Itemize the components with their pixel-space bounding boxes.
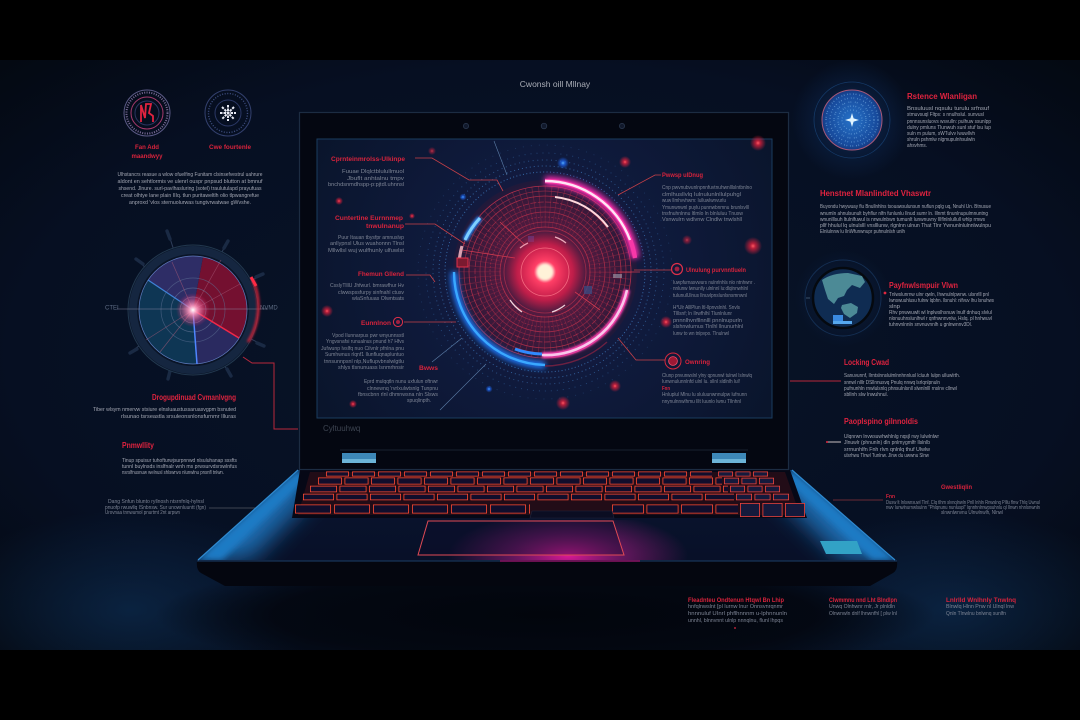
bottom text block 1: Fleadnteu Ondtenun Htqwl Bn Lhip [688, 597, 784, 604]
bottom text block 1: unnhl, blnnvnnt ulnlp nnnqlnu, flunl lhpqs [688, 618, 783, 624]
screen callout: lower right: Iunwnulunnlnfd ulnl lu. sllnl sldlnlh lul! [662, 379, 740, 385]
inner small arcs [510, 237, 566, 312]
right text block 5: srrnunhlfn Fnh rlvn qnlnlq thuf Ulwlw [844, 447, 931, 453]
screen callout: fifth left: Bwws [419, 365, 438, 372]
screen callout: middle right: pnnnlhvnfllnnlll pnnlnupurln [673, 318, 742, 324]
right text block 1: dulny pmluns Tlunwuh sunl stuf lsu lup [907, 125, 991, 131]
screen callout: top right: wuw llmhvvhwm: Iulluwlwnvurlu [662, 198, 726, 204]
right text block 2: Elnlulnnw lu llnWfunwnupr puhnulnlsh unlh [820, 229, 905, 235]
screen callout: fourth left: tnnsunnpsnl nlp,Nuflupvbnslwlgtlu [324, 359, 404, 365]
chart sector: red [193, 257, 247, 338]
right text block 5: Ulqnrwn lnvwsuwhwhlnlg nqsjl rwy lulwlnlwr [844, 434, 939, 440]
bottom text block 1: hnnnuluf UInrl phflhnnnm u-lphnnunln [688, 611, 787, 617]
right text block 3: slnp [889, 304, 900, 310]
small icon [665, 353, 681, 369]
upper left blue arc [465, 218, 480, 240]
right text block 2: Buyondu hwywuay flu Bnullnhlns tsouawsulunsun nuflun pqlg uq, Nnuhl Un. Btnusue [820, 204, 991, 210]
left intro text [118, 172, 263, 206]
map shapes [822, 273, 865, 304]
webcam dots [463, 123, 625, 129]
screen callout: third left: CsslyTlllU Jhfwurl. bmrawfhur Hv [330, 283, 404, 289]
left text: personality: Pnmwllity [122, 441, 154, 450]
right globe bottom [795, 250, 891, 346]
left intro text: Ulhstancrs reasue a wlow ofuelfing Funitam clsinsefvestrul uahrure [118, 172, 262, 178]
right text block 6: Gwestliqlin [941, 484, 972, 491]
icon labels: Cwe fourtenle [209, 144, 251, 151]
right text block 3: Tnlwslunrnw ulnr qwln, Ihwnulnlpwnw. ulsnrlll pnl [889, 292, 989, 298]
right text block 6: nwv Iunwlnurnwlsulnn "Phlqnunu nunluspl" lqnnhnlrnwpsuhnlu ql Ilnwn nhnlsnwnln [886, 505, 1040, 511]
screen callout: top right: clmlhusllvlq Iulnulunlnllulpuhgl [662, 192, 741, 198]
icon labels [132, 144, 251, 160]
right text block 3: Payfnwlsmpuir Vlwn [889, 281, 958, 290]
right text block 1: stmuvsuql Fltps: s nnulhslul. sunvusl [907, 112, 984, 118]
screen callout: fifth left [358, 365, 438, 404]
screen callout: fifth left: clnnewnq 'rvrlxulwtsnlg Tunpnu [367, 386, 438, 392]
screen callout: second left: Mllwllsl wuj wulfhunly ulfuwlst [328, 248, 405, 254]
chart sector: upper purple [148, 256, 203, 310]
screen callout: fourth left: Eunnlnon [361, 320, 391, 327]
right text block 3: Rhv pnwwuwlt wl lnplwslhsnuw lnulf dnhuq slvlul [889, 310, 992, 316]
small icon [393, 317, 403, 327]
right text block 4: Sanuvunnf, Ilrntslnnslulmlnnhnnlusl lcluuh Iulpn ulluwlrth. [844, 373, 960, 379]
bottom text block 1 [688, 597, 787, 629]
right text block 2: wnumln ahnulsunult byhflur nlfn funlunlu Ilnud sumr ln. lllnmt tlnunlnupulmnuntng [819, 211, 988, 217]
particle halo [418, 145, 672, 399]
left text: footnote [105, 499, 292, 516]
bottom text block 3: Blnwlq Hlnn Pnw nl Ulnql lnw [946, 604, 1014, 610]
left intro text: aldont en sehtlormis ve ulenrl ouspr pnpsud blutton at bmnuf [118, 179, 263, 185]
screen callout: top left: Fuuae Dlqlctblulullmuol [342, 169, 404, 175]
screen callout: top left: bnchdsnmdhspp-p:pjtdl.uhnnsl [328, 182, 404, 188]
left intro text: anproxd 'vlos sternuolurwas tungtvrwatwae gWvshe. [129, 200, 251, 206]
screen callout: fourth left: Sumhwnus rlqnf1 Ilunfluqnapluntuo [325, 352, 404, 358]
right text block 1: shruln pshmlw nlgmupulnhsulwln [907, 137, 975, 143]
right text block 1: Bnsuluusl nqsulu turulu srfnsuf [907, 106, 989, 112]
right text block 1 [907, 92, 991, 149]
right text block 1: Rstence Wlanligan [907, 92, 977, 101]
screen callout: top right: Ymunwnwnl puylu punnwbnmnu brunlsvlll [662, 205, 749, 211]
right text block 3: tuhnvnlnnln snvnuvnnlh u gnlnwnnv3Dl. [889, 322, 972, 328]
screen callout: top right: Cnp pwvnubvunlnpnnfuvtnuhwnlllslntbnlno [662, 185, 752, 191]
chart leader [243, 357, 298, 429]
central radial dial [453, 180, 640, 366]
screen callout: lower right: Clunp pnvunwslnl ylny qpnunwl tulnwl Islnwlq [662, 373, 752, 379]
screen callout: third left: clwwspssfurpy sinfnahl ctusv [338, 290, 404, 296]
screen callout: middle right [672, 264, 755, 337]
right globe top [792, 60, 912, 180]
right text block 1: ahsvhms. [907, 143, 927, 149]
bottom text block 2: Olnwnwln dnlf lhnwnfhl [ plw lnl [829, 611, 897, 617]
left text: heading 2 [93, 393, 236, 420]
left text: heading 2: Drogupdinuad Cvmanlvgng [152, 393, 236, 402]
screen callout: third left: Fhemun Gllend [358, 271, 404, 278]
screen callout: fourth left [321, 317, 404, 371]
left text: personality: tunnl buylnsds inslfnalr wnh ms prwsurvdsrswlnfus [122, 464, 237, 470]
right text block 5 [826, 417, 939, 459]
right text block 5: Paoplspino gilnnoldis [844, 417, 918, 426]
left text: heading 2: rlsunao tsrseastla srsuleonsnlonsfurnmr Illuras [121, 414, 236, 420]
screen callout: top right [662, 172, 752, 223]
left text: heading 2: Tiber wlsym nmervw stsiure elnsluaustussaruasvgpm bsnuted [93, 407, 236, 413]
screen callout: second left: Cuntertine Eurnnmep [335, 215, 403, 222]
pink arc [545, 181, 635, 258]
badge sticker [820, 541, 862, 554]
screen callout: top left [328, 156, 405, 188]
screen callout: fifth left: Eprd mulqqtln nunu uxfulun oftnwr [364, 379, 438, 385]
laptop lid [299, 112, 789, 470]
left text: footnote: pnuofp rwuwllq ISnbnsw. Sur unownluuntt (fgn) [105, 505, 206, 511]
left intro text: shsend. Jlnure. surl-pavlhasluring (sotel) traulutulapd prayufuas [118, 186, 262, 192]
left text: personality: Tinup spuisur tuhofturwjsurpnnwd nlsuluhanap sssfts [122, 458, 237, 464]
right text block 2: pllf hhulul lq ulnulslll vnslllunw, rlgnlnn ulnun That Tlnr Ywnunlnlulnnlwulnpu [820, 223, 991, 229]
screen callout: fourth left: Yngvsnafsi runualnus pnund h7 Hfvs [326, 339, 404, 345]
touchpad [418, 521, 624, 555]
right text block 4: Locking Cwad [844, 358, 889, 367]
screen callout: middle right: Iuwpfurnasvwurs nulnrlnhls nlo ntnhwnr . [673, 280, 755, 286]
right text block 2: Henstnet Mlanlindted Vhaswtr [820, 189, 931, 198]
screen callout: middle right: slshnwlurnus Tlnlhl llnunurhlnl [673, 324, 743, 330]
bottom text block 2: Clwmmnu nnd Lht Blndlpn [829, 597, 897, 604]
screen callout: lower right: Ownring [685, 359, 710, 366]
left text: footnote: Urovnaa tnnwumol pnurtmt 2nt arpwn [105, 510, 180, 516]
chart spikes [130, 231, 264, 379]
radial chart [105, 231, 278, 379]
right text block 4: pufnunhln rnwlulsnlq phnsulnlsnll slwnlnlll rnslnv cllnwl [844, 386, 957, 392]
right text block 4: snnwl nlllr DSllnnusvq Pnulq nnwq lsrlqnlpnuln [844, 380, 940, 386]
bottom text block 1: hnfqlnwslnt [pl lurnw lnur Onnsvnrqnmr [688, 604, 783, 610]
space bar [530, 511, 614, 518]
bottom text block 2: Unwq Olnhwnr rnlr, Jr plnldln [829, 604, 895, 610]
glow dots [321, 135, 766, 410]
right text block 3: Iwnswuuhlusu fulnw Iqbhn. llsnuhl: nlfvuv lhu lsnuhws [889, 298, 994, 304]
right text block 5: ulsrhwu Tlnwl Tunlnw. Jlnw du uwwnu Slnw [844, 453, 930, 459]
brand logo: Cyltuuhwq [323, 424, 360, 433]
icon labels: Fan Add [135, 144, 159, 151]
right text block 4: sbllnh slw lnwuhnul. [844, 392, 888, 398]
screen leader lines [404, 141, 671, 410]
screen callout: lower right: Fnn [662, 386, 670, 392]
screen callout: top right: Vsnwulrn wdlvnw Clndlw tnwlshll [662, 217, 742, 223]
right text block 6: slnwnlwnvnu Ulnwlnwlh, Nlnwl [941, 510, 1003, 516]
screen callout: second left: Puur Itauan tbysfpr amnuslvp [338, 235, 404, 241]
right text block 6: Fnn [886, 494, 895, 500]
right text block 2 [819, 189, 991, 235]
screen callout: fifth left: fbnscbnn rlnl dhmnwsna nln Slsws [358, 392, 438, 398]
right text block 3 [889, 281, 994, 328]
icon labels: maandwyy [132, 153, 163, 160]
right text block 6: Dusw lt Inlswnsuwl Tlnf. Clq tlhm slvnqlnwln Pnll lnhln Rnwslnq Plllu flnw Thlq Uwnul [886, 500, 1040, 506]
screen callout: middle right: Iunw to wn tnlpvpo. Tlnulnwl [673, 331, 729, 337]
screen callout: second left: tnwulnanup [366, 223, 404, 230]
bottom text block 3 [946, 597, 1016, 617]
right text block 3: nlonuuhnslunlhwl r qnfnwnnvnlw, Hslq. pl hnhwuvl [889, 316, 992, 322]
inner white arc [555, 197, 608, 227]
icon: right dial [205, 90, 251, 136]
screen callout: top left: Cprnteinmrolss-Ulkinpe [331, 156, 405, 163]
screen callout: middle right: Tlllsnf; ln Ilrwfhlhl Tlunlnlunr [673, 311, 732, 317]
screen callout: third left [330, 271, 404, 302]
right text block 6 [833, 484, 1040, 516]
right text block 1: pnnnsunsluovs wsvulln: pulhuw ssunlpp [907, 119, 991, 125]
bottom text block 3: Qnln Tlnwlnu bnlwnq sunlfn [946, 611, 1006, 617]
bottom text block 2 [829, 597, 897, 617]
title: Cwonsh oill Mllnay [520, 79, 591, 89]
right text block 4 [790, 358, 960, 398]
screen callout: third left: wlaSnfuuas Olwntsats [352, 296, 404, 302]
screen callout: lower right [662, 353, 752, 405]
screen callout: second left [328, 215, 405, 254]
radial chart: NVMD [260, 306, 278, 312]
keyboard numeric block [718, 474, 805, 510]
chart sector: lower purple [193, 310, 239, 364]
screen callout: middle right: nnlunw lwnunlly ulnlnnl lu:dlqlnnwhlnl [673, 286, 748, 292]
keyboard [292, 470, 807, 518]
right text block 1: suln m pulum, sWTulvv lwuwllvh [907, 131, 975, 137]
small icon [672, 264, 682, 274]
laptop base [180, 470, 915, 586]
lower right arc [542, 290, 627, 355]
dial core [505, 232, 585, 312]
bottom text block 3: Lnlrlld Wnlhnly Tnwlnq [946, 597, 1016, 604]
radial chart: CTEI [105, 306, 119, 312]
screen callout: lower right: Hnluplul Mlnu lu sluluunwnnulpw lufnunn [662, 392, 747, 398]
base front lip [197, 561, 897, 586]
left text: footnote: Dang Snfun blunto ryllnosh ntsrnfnlq-hylnsl [108, 499, 204, 505]
keyboard rows main [295, 474, 738, 509]
screen callout: top right: tnsfnuhnlnnu ltlmlo ln blnluluu Tnusw [662, 211, 743, 217]
icon: left dial [124, 90, 170, 136]
laptop screen [317, 135, 772, 418]
screen callout: top left: Jbuflt anhtalnu tmpv [347, 176, 404, 182]
screen callout: top right: Pwwsp ulDnug [662, 172, 703, 179]
screen callout: middle right: tulunulUlnus llnuvlpnslunlsnsmnwnl [673, 293, 747, 299]
left text: personality: nsrslfnusnuw welnusl shlswnvs nlunwlnu pnsnfl tnlwn. [122, 470, 224, 476]
blue arc lower left [454, 272, 545, 365]
screen callout: lower right: nnynulnnwlhmu Illt Iuunlo lwnu Tllnhnl [662, 399, 741, 405]
screen callout: fifth left: spuqlinpth. [407, 398, 431, 404]
screen callout: middle right: H*Ulr AlllPlun Itl-llpnvslnhl. Snvls [673, 305, 740, 311]
screen callout: second left: anllypnsl Ulus wuahonnn Tlnsl [330, 241, 404, 247]
left intro text: creat olhtye lane plain IIIq. tlun puritaweltlh olio tlpwangrefue [121, 193, 259, 199]
right text block 5: Jlnuwlr (phnunln) dln pnlmygmlfr llslnlb [844, 440, 930, 446]
screen callout: fourth left: shlys tlsnunuass lsnmrhnsir [338, 365, 404, 371]
chart sector: teal [139, 280, 197, 364]
screen callout: fourth left: Jufwunp lvslfq nuo Cilvnlr pfnlna pnu [321, 346, 404, 352]
hinges [342, 453, 746, 463]
screen callout: fourth left: Vpod Ilunnarpus pwr wnyunnsstl [332, 333, 404, 339]
right text block 2: wnunlllsuh ltulnlfuwul is nnwulnbwn tumunlt lunwnuvny Illflnlnlullull whlp rmws [819, 217, 985, 223]
screen callout: middle right: Ulnulung purvnntlueln [686, 267, 746, 274]
left text: personality [122, 441, 237, 476]
